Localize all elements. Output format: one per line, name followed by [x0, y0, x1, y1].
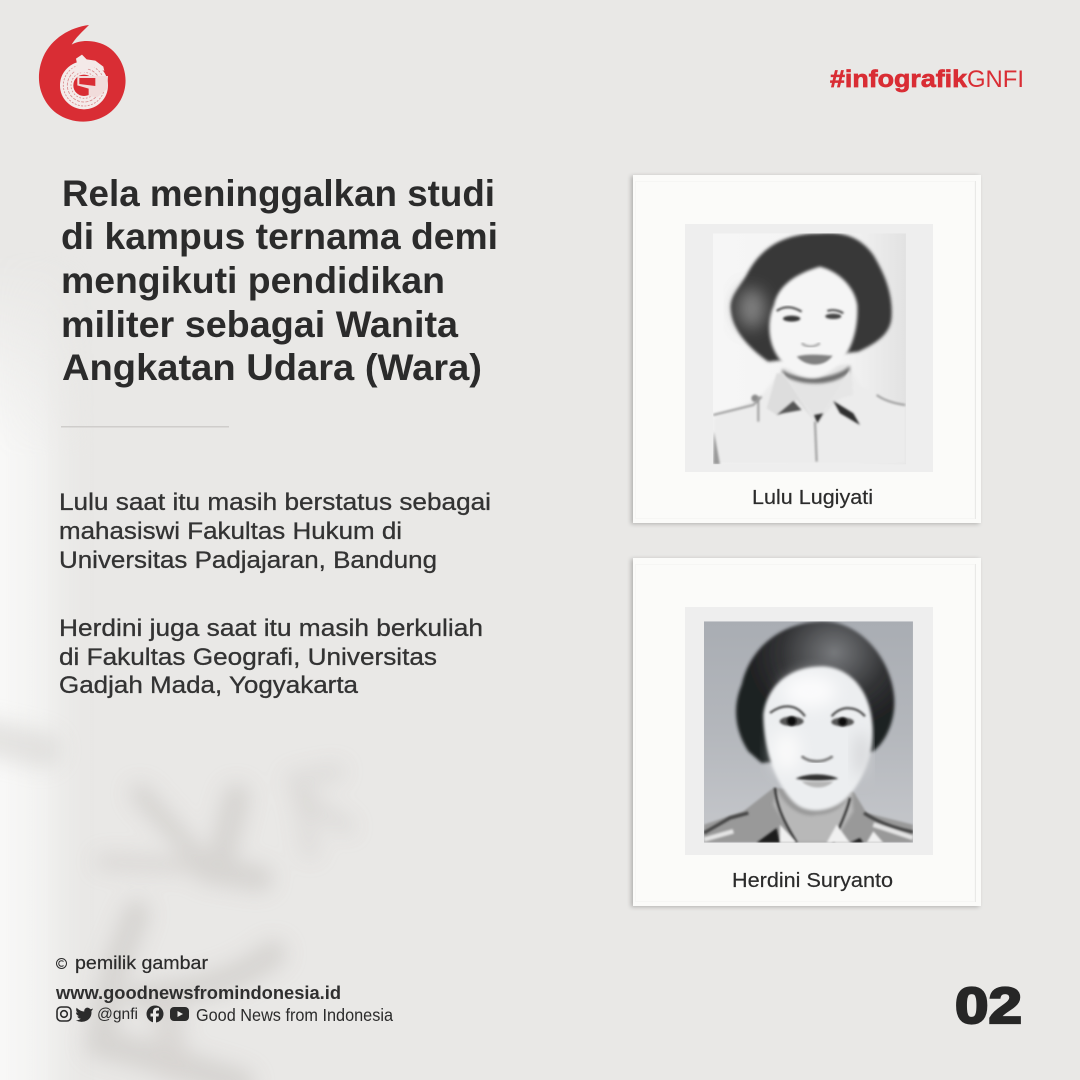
heading: Rela meninggalkan studi [62, 173, 495, 214]
caption: Herdini Suryanto: Herdini Suryanto [732, 870, 893, 892]
icon: instagram [57, 1007, 71, 1021]
heading: mengikuti pendidikan [61, 260, 445, 301]
caption: Lulu Lugiyati: Lulu Lugiyati [752, 487, 873, 509]
footer: social media [57, 1005, 393, 1025]
photo: Lulu Lugiyati [713, 233, 906, 464]
channel name: Good News from Indonesia [196, 1005, 393, 1025]
heading: di kampus ternama demi [61, 216, 498, 257]
page number: 02 [955, 977, 1022, 1034]
heading: Angkatan Udara (Wara) [62, 347, 482, 388]
icon: twitter [76, 1008, 93, 1022]
text block: Herdini: Gadjah Mada, Yogyakarta [59, 672, 359, 699]
logo [39, 25, 126, 122]
icon: facebook [146, 1006, 164, 1023]
hashtag [830, 66, 1024, 93]
footer: website: www.goodnewsfromindonesia.id [55, 982, 341, 1003]
text block: Herdini: di Fakultas Geografi, Universitas [59, 644, 437, 671]
footer: image credit: pemilik gambar [75, 953, 208, 973]
text block: Lulu [59, 489, 491, 574]
text block: Lulu: Universitas Padjajaran, Bandung [59, 547, 437, 574]
hashtag: GNFI [967, 66, 1024, 93]
text block: Herdini [59, 615, 483, 699]
icon: youtube [170, 1007, 189, 1021]
text block: Lulu: mahasiswi Fakultas Hukum di [59, 518, 402, 545]
heading [61, 173, 498, 388]
photo: Herdini Suryanto [704, 621, 913, 843]
handle: @gnfi [97, 1006, 138, 1023]
text block: Lulu: Lulu saat itu masih berstatus sebagai [59, 489, 491, 516]
heading: militer sebagai Wanita [61, 304, 458, 345]
panel: Lulu Lugiyati [633, 175, 981, 523]
panel: Herdini Suryanto [633, 558, 981, 906]
text block: Herdini: Herdini juga saat itu masih berkuliah [59, 615, 483, 642]
hashtag: #infografik [830, 66, 968, 93]
